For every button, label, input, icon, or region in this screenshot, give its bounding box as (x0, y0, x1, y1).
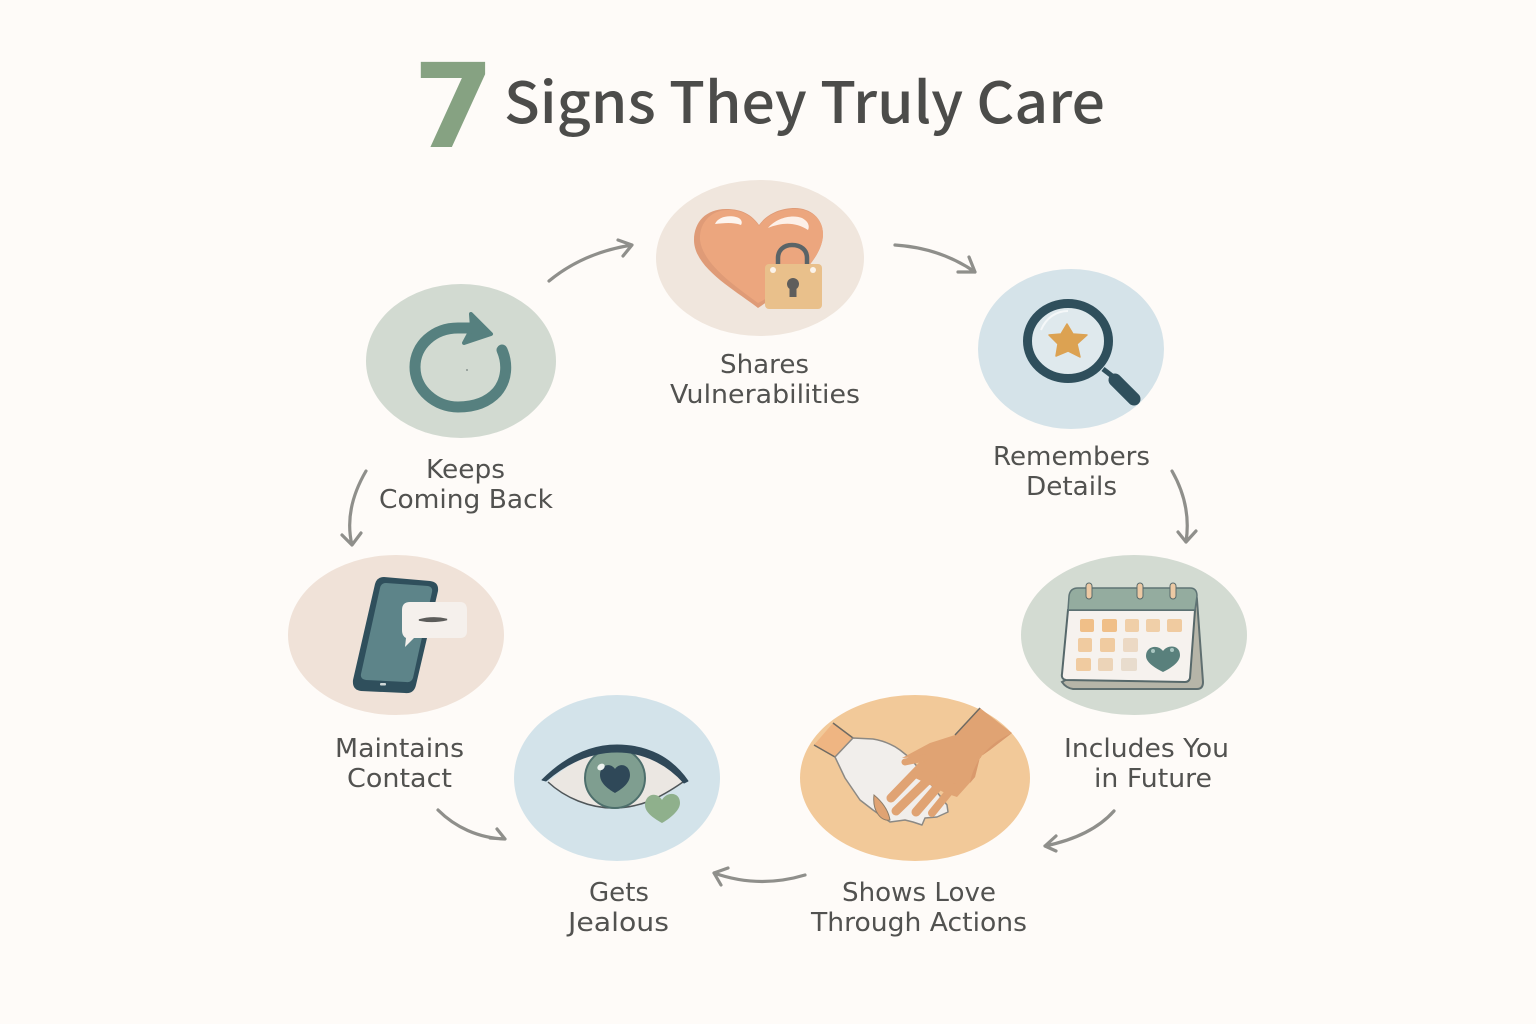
panel: maintains contact (288, 555, 504, 794)
label (810, 878, 1027, 938)
background circle (288, 555, 504, 715)
background circle (656, 180, 864, 336)
arrow: vulnerabilities to details (895, 245, 975, 272)
panel: gets jealous (514, 695, 720, 938)
panel: includes you in future (1021, 555, 1247, 794)
label: Vulnerabilities (670, 380, 860, 410)
label (1064, 734, 1229, 794)
label: Remembers (993, 442, 1150, 472)
arrow: future to actions (1045, 811, 1114, 851)
icon: phone with message bubble (353, 577, 467, 693)
label (670, 350, 860, 410)
panel: shows love through actions (800, 695, 1030, 938)
label: Includes You (1064, 734, 1229, 764)
label: Details (1026, 472, 1117, 502)
label: Jealous (566, 908, 669, 938)
arrow: actions to jealous (714, 868, 805, 885)
arrow: coming back to contact (342, 471, 366, 545)
icon: circular arrow (415, 314, 506, 407)
label (993, 442, 1150, 502)
label: Gets (589, 878, 649, 908)
background circle (1021, 555, 1247, 715)
panel: remembers details (978, 269, 1164, 502)
label: Keeps (426, 455, 505, 485)
label: Shows Love (842, 878, 996, 908)
label (379, 455, 553, 515)
label: Shares (720, 350, 809, 380)
label: in Future (1094, 764, 1212, 794)
icon: holding hands (814, 708, 1012, 825)
icon: calendar with heart (1062, 583, 1203, 689)
panel: shares vulnerabilities (656, 180, 864, 410)
icon: heart with padlock (694, 208, 823, 309)
numeral 7: 7 (413, 38, 494, 175)
label: Contact (347, 764, 452, 794)
label: Through Actions (810, 908, 1027, 938)
background circle (366, 284, 556, 438)
arrow: details to future (1172, 471, 1196, 542)
arrow: coming back to vulnerabilities (549, 240, 632, 281)
label: Maintains (335, 734, 464, 764)
title (413, 38, 1105, 175)
label (335, 734, 464, 794)
icon: eye with heart (542, 745, 688, 823)
background circle (514, 695, 720, 861)
title text: Signs They Truly Care (504, 58, 1105, 140)
background circle (800, 695, 1030, 861)
panel: keeps coming back (366, 284, 556, 515)
icon: magnifying glass with star (1028, 304, 1134, 399)
arrow: contact to jealous (438, 810, 505, 839)
label (566, 878, 669, 938)
background circle (978, 269, 1164, 429)
label: Coming Back (379, 485, 553, 515)
